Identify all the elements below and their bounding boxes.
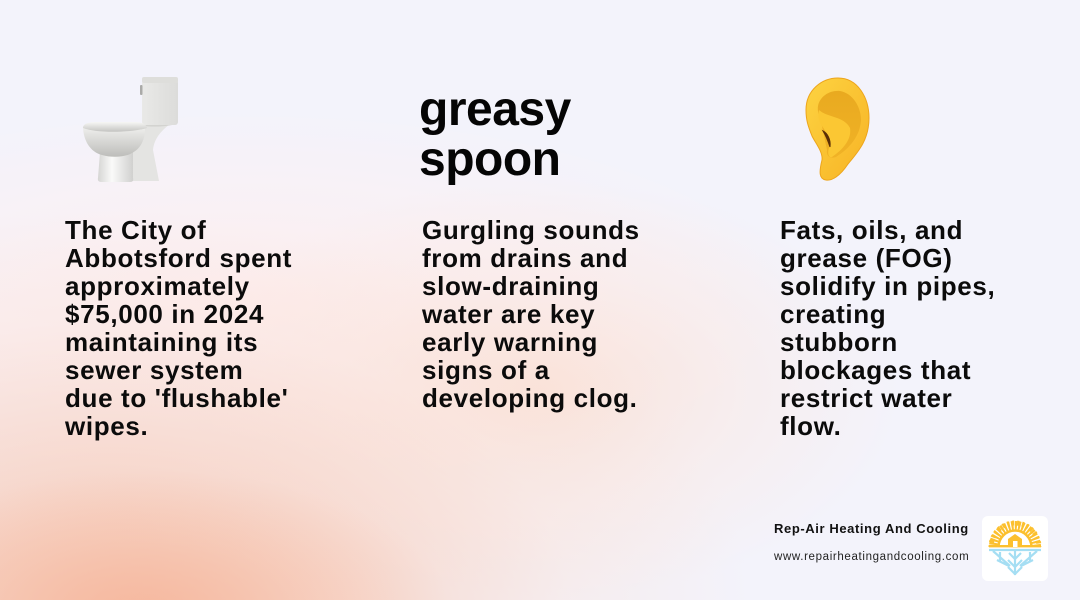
rear column	[120, 124, 170, 181]
text block: fats, oils and grease: Fats, oils, and	[780, 215, 963, 245]
text block: Abbotsford wipes: The City of	[65, 215, 206, 245]
bowl	[83, 126, 145, 157]
icon: toilet	[83, 77, 178, 182]
text block: Abbotsford wipes: maintaining its	[65, 327, 258, 357]
pedestal	[98, 152, 133, 182]
text block: fats, oils and grease: flow.	[780, 411, 842, 441]
company name: Rep-Air Heating And Cooling	[774, 521, 969, 536]
text block: early warning signs: from drains and	[422, 243, 628, 273]
text block: Abbotsford wipes: due to 'flushable'	[65, 383, 288, 413]
heading: greasy spoon: spoon	[419, 133, 560, 186]
text block: fats, oils and grease: solidify in pipes,	[780, 271, 995, 301]
text block: fats, oils and grease: grease (FOG)	[780, 243, 953, 273]
text block: early warning signs: water are key	[422, 299, 595, 329]
icon: ear	[806, 78, 870, 181]
heading: greasy spoon	[419, 83, 571, 186]
text block: Abbotsford wipes: wipes.	[65, 411, 148, 441]
logo	[982, 516, 1048, 581]
text block: early warning signs: early warning	[422, 327, 598, 357]
text block: Abbotsford wipes: Abbotsford spent	[65, 243, 292, 273]
text block: fats, oils and grease: stubborn	[780, 327, 898, 357]
text block: fats, oils and grease: creating	[780, 299, 886, 329]
company website: www.repairheatingandcooling.com	[774, 551, 969, 563]
text block: early warning signs: signs of a	[422, 355, 550, 385]
text block: early warning signs: Gurgling sounds	[422, 215, 640, 245]
text block: Abbotsford wipes: approximately	[65, 271, 250, 301]
text block: fats, oils and grease: blockages that	[780, 355, 971, 385]
heading: greasy spoon: greasy	[419, 83, 571, 136]
text block: fats, oils and grease: restrict water	[780, 383, 952, 413]
text block: early warning signs: slow-draining	[422, 271, 599, 301]
text block: fats, oils and grease	[780, 215, 995, 441]
text block: Abbotsford wipes: sewer system	[65, 355, 243, 385]
text block: early warning signs: developing clog.	[422, 383, 638, 413]
text block: Abbotsford wipes	[64, 215, 292, 441]
text block: Abbotsford wipes: $75,000 in 2024	[65, 299, 264, 329]
text block: early warning signs	[422, 215, 640, 413]
